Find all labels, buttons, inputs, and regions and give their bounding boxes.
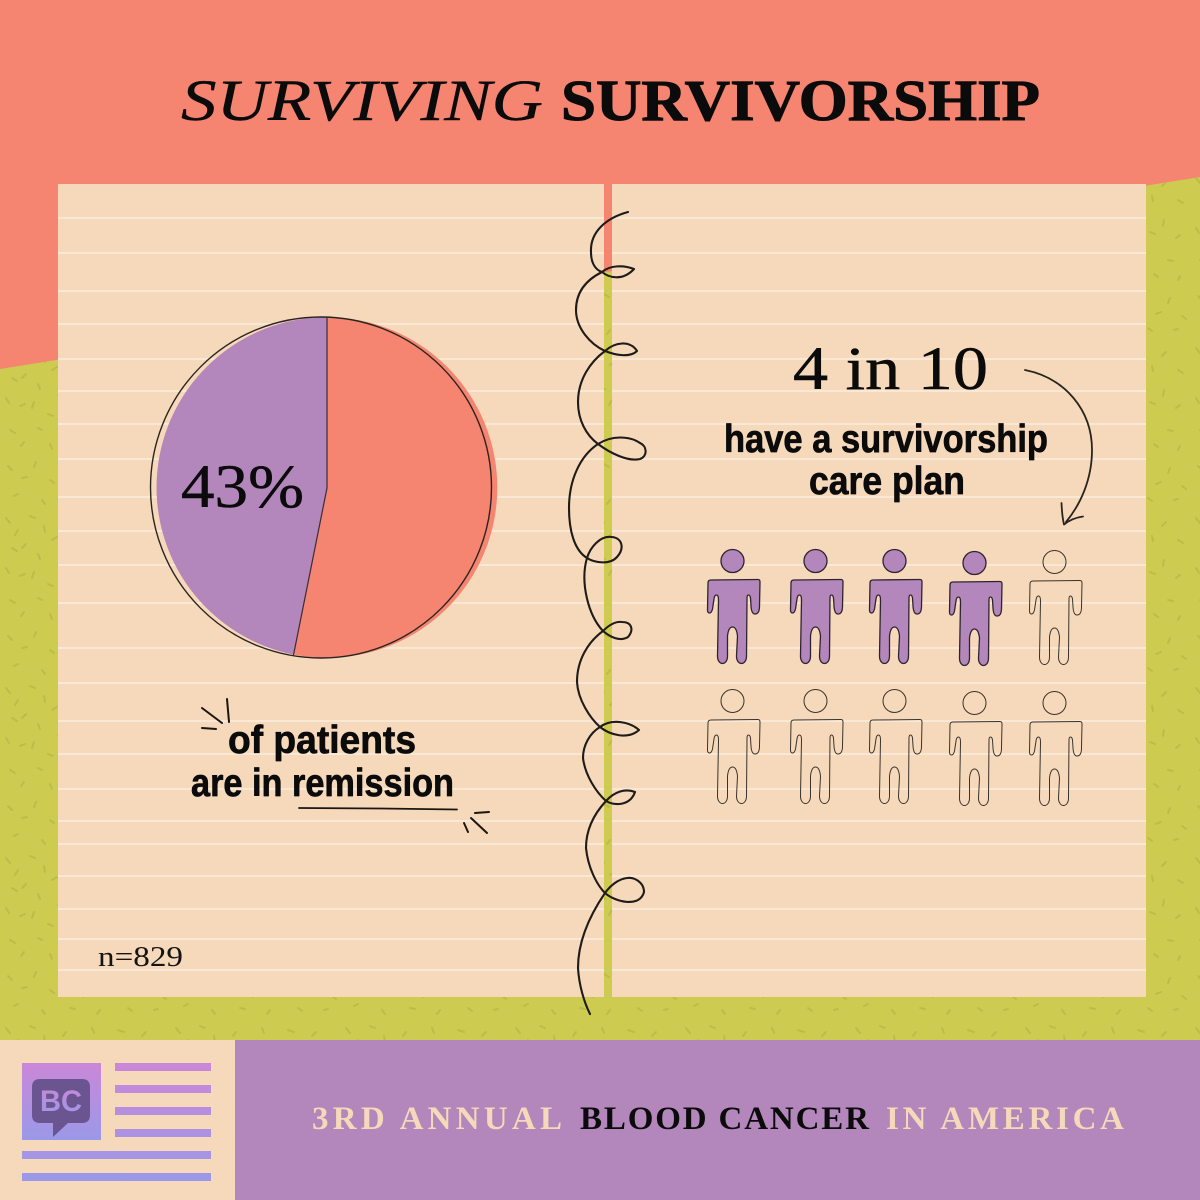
footer: report name band — [235, 1040, 1200, 1200]
person filled 4 — [950, 552, 1002, 666]
pie chart: 43 percent in remission: 43% — [181, 454, 304, 521]
title: SURVIVORSHIP — [561, 68, 1040, 133]
person filled 1 — [708, 550, 760, 664]
notebook spiral binding — [569, 212, 646, 1014]
caption: of patients are in remission: are in remission — [191, 762, 454, 805]
sample size note: n=829 — [98, 941, 183, 973]
footer: report name band: 3RD ANNUAL — [312, 1101, 562, 1137]
title: SURVIVING — [181, 68, 543, 133]
caption: of patients are in remission: of patients — [228, 719, 416, 762]
caption: have a survivorship care plan: care plan — [809, 460, 965, 503]
panel: right notebook page — [612, 184, 1146, 997]
arrow: curved to pictogram — [1025, 370, 1092, 524]
footer: report name band: BLOOD CANCER — [580, 1101, 870, 1137]
title — [181, 68, 1040, 133]
caption: have a survivorship care plan — [724, 418, 1048, 503]
person outline 6 — [708, 690, 760, 804]
statistic: 4 in 10: 4 in 10 — [793, 336, 988, 403]
pie chart: 43 percent in remission — [150, 317, 497, 658]
footer: logo panel — [0, 1040, 235, 1200]
panel: left notebook page — [58, 184, 604, 997]
person outline 8 — [870, 690, 922, 804]
logo: text bars — [22, 1063, 211, 1181]
person filled 2 — [790, 550, 843, 664]
person filled 3 — [870, 550, 922, 664]
pictogram: 4 of 10 people highlighted — [708, 550, 1082, 806]
caption: of patients are in remission — [191, 699, 489, 833]
person outline 9 — [950, 692, 1002, 806]
footer: report name band: IN AMERICA — [886, 1101, 1124, 1137]
caption: have a survivorship care plan: have a survivorship — [724, 418, 1048, 461]
background: speckled green shape — [0, 177, 1200, 1040]
person outline 5 — [1030, 550, 1082, 664]
person outline 10 — [1030, 692, 1082, 806]
logo: BC speech bubble — [22, 1063, 101, 1140]
logo: BC speech bubble: BC — [40, 1085, 82, 1118]
person outline 7 — [790, 690, 843, 804]
